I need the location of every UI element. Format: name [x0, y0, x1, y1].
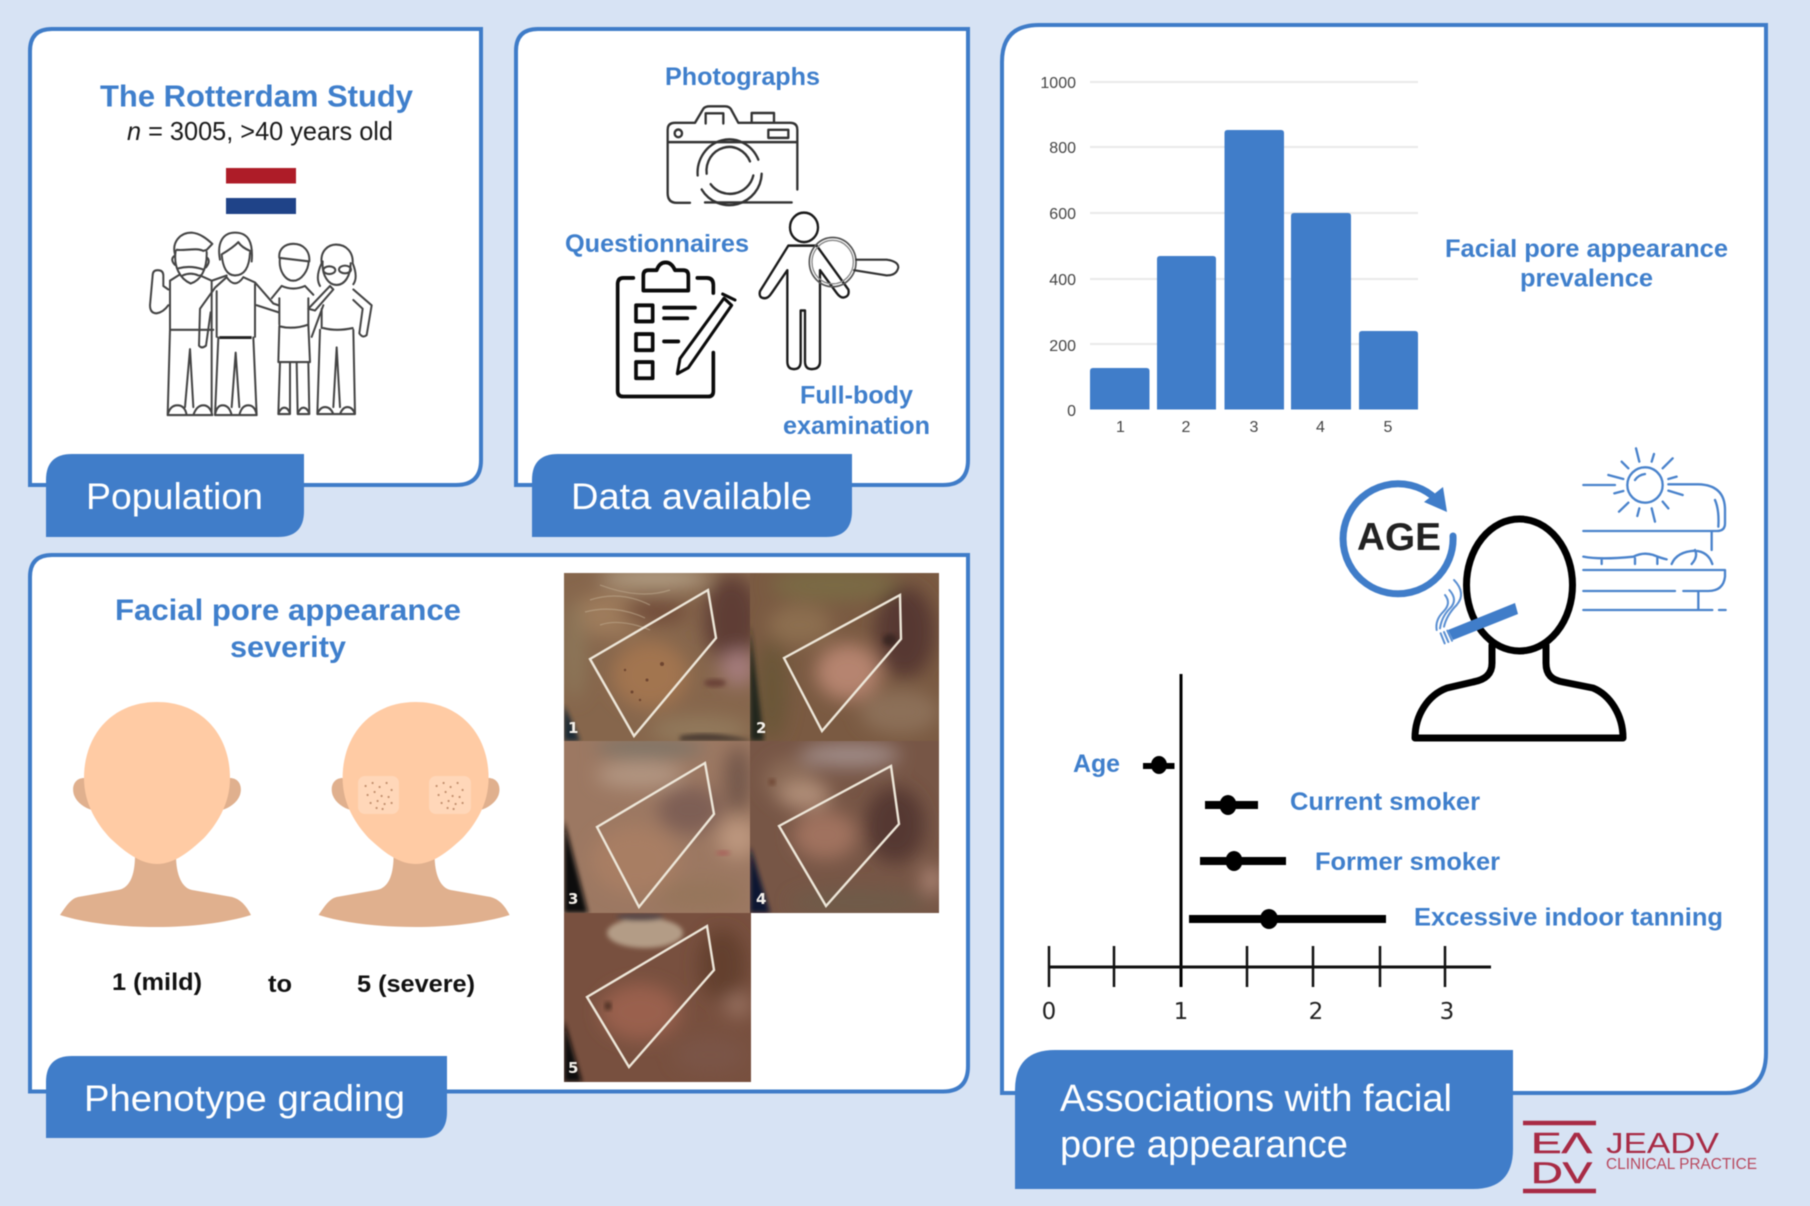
tab: Associations with facial pore appearance: pore appearance	[1060, 1124, 1348, 1166]
photo 3: grade 3 cheek: 3	[568, 890, 578, 908]
labels: severity scale: to	[268, 971, 292, 998]
photo 5: grade 5 cheek: 5	[568, 1059, 578, 1077]
icon: head with severe pores	[319, 702, 510, 927]
heading: prevalence	[1445, 235, 1728, 292]
label: Full-body examination	[783, 382, 930, 440]
tab: Population	[46, 454, 304, 537]
label: Questionnaires: Questionnaires	[565, 230, 749, 258]
heading: The Rotterdam Study: The Rotterdam Study	[100, 78, 414, 114]
photo 2: grade 2 cheek	[749, 572, 940, 742]
bar chart: prevalence: 2	[1182, 419, 1191, 436]
bar chart: prevalence: 400	[1049, 272, 1076, 289]
tab: Associations with facial pore appearance: Associations with facial	[1060, 1078, 1452, 1120]
photo 5: grade 5 cheek	[564, 913, 752, 1082]
bar chart: prevalence: 600	[1049, 206, 1076, 223]
estimate: excessive indoor tanning	[1189, 904, 1723, 932]
photo 2: grade 2 cheek: 2	[756, 719, 766, 737]
bar chart: prevalence: 5	[1384, 419, 1393, 436]
bar chart: prevalence: 200	[1049, 338, 1076, 355]
icon: age cycle	[1343, 484, 1453, 594]
label: Full-body examination: Full-body	[800, 382, 913, 410]
estimate: current smoker: Current smoker	[1290, 788, 1480, 816]
logo: JEADV Clinical Practice	[1523, 1123, 1757, 1191]
bar chart: prevalence: 1	[1116, 419, 1125, 436]
tab: Data available: Data available	[571, 475, 812, 517]
icon: clipboard with pencil	[618, 262, 735, 396]
photo 4: grade 4 cheek	[750, 741, 942, 914]
logo: JEADV Clinical Practice: JEADV	[1606, 1128, 1720, 1160]
labels: severity scale: 5 (severe)	[357, 971, 475, 998]
logo: JEADV Clinical Practice: EΛ	[1531, 1128, 1593, 1160]
icon: camera	[668, 106, 797, 205]
tab: Associations with facial pore appearance	[1015, 1050, 1513, 1189]
icon: tanning bed with sun	[1583, 448, 1726, 610]
icon: full-body examination person	[760, 213, 898, 369]
forest plot: 1	[1174, 999, 1188, 1025]
estimate: excessive indoor tanning: Excessive indoor tanning	[1414, 904, 1723, 932]
forest plot	[1042, 674, 1723, 1025]
heading: prevalence: Facial pore appearance	[1445, 235, 1728, 263]
photo 1: grade 1 cheek	[562, 569, 760, 744]
panel: population	[30, 29, 481, 537]
bar chart: prevalence: 3	[1250, 419, 1259, 436]
bar chart: prevalence: 0	[1067, 403, 1076, 420]
bar chart: prevalence: 4	[1316, 419, 1325, 436]
heading: Facial pore appearance severity: Facial pore appearance	[115, 594, 461, 627]
tab: Data available	[532, 454, 852, 537]
photo 1: grade 1 cheek: 1	[568, 719, 578, 737]
icon: group of people	[150, 233, 372, 415]
panel: phenotype grading	[27, 552, 971, 1139]
panel: data available	[516, 29, 968, 537]
icon: head silhouette	[1415, 519, 1623, 738]
icon: cigarette with smoke	[1436, 580, 1518, 643]
icon: age cycle: AGE	[1357, 516, 1441, 559]
panel: associations	[1002, 25, 1766, 1189]
photo 3: grade 3 cheek	[564, 738, 758, 913]
estimate: current smoker	[1205, 788, 1480, 816]
bar chart: prevalence	[1040, 75, 1418, 436]
forest plot: 3	[1440, 999, 1454, 1025]
heading: Facial pore appearance severity	[115, 594, 461, 664]
estimate: age	[1073, 750, 1174, 778]
heading: Facial pore appearance severity: severity	[230, 631, 346, 664]
icon: Dutch flag	[226, 168, 296, 214]
label: Full-body examination: examination	[783, 412, 930, 440]
photo 4: grade 4 cheek: 4	[756, 890, 766, 908]
label: Photographs: Photographs	[665, 63, 820, 91]
tab: Population: Population	[86, 475, 263, 517]
heading: prevalence: prevalence	[1520, 264, 1653, 292]
icon: head with mild pores	[60, 702, 251, 927]
forest plot: 0	[1042, 999, 1056, 1025]
labels: severity scale	[112, 969, 475, 998]
estimate: former smoker	[1200, 848, 1500, 876]
labels: severity scale: 1 (mild)	[112, 969, 202, 996]
bar chart: prevalence: 800	[1049, 140, 1076, 157]
estimate: age: Age	[1073, 750, 1120, 778]
estimate: former smoker: Former smoker	[1315, 848, 1500, 876]
forest plot: 2	[1309, 999, 1323, 1025]
text: sample size: n = 3005, >40 years old	[127, 118, 393, 146]
bar chart: prevalence: 1000	[1040, 75, 1076, 92]
logo: JEADV Clinical Practice: CLINICAL PRACTICE	[1606, 1156, 1757, 1173]
tab: Phenotype grading: Phenotype grading	[84, 1077, 405, 1119]
logo: JEADV Clinical Practice: DV	[1531, 1157, 1592, 1190]
tab: Phenotype grading	[46, 1056, 447, 1138]
